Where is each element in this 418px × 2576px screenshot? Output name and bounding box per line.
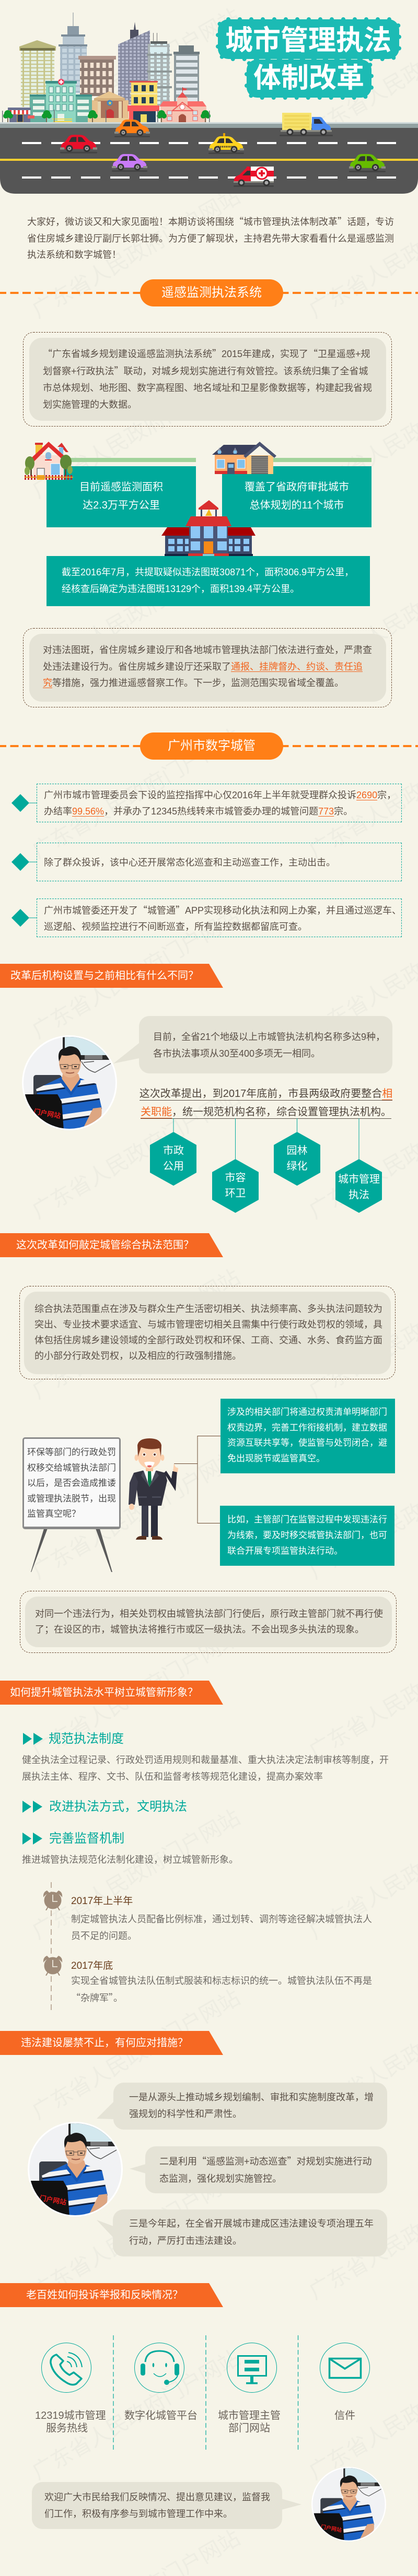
body: standardize system [22,1755,389,1782]
hexagon: landscaping: 绿化 [286,1160,307,1172]
banner question 1: 改革后机构设置与之前相比有什么不同？ [10,970,199,982]
panel: system description: 划实施管理的大数据。 [43,399,137,410]
watermark background: 广东省人民政府门户网站 [28,724,244,863]
speech bubble: first measure: 一是从源头上推动城乡规划编制、审批和实施制度改革，增 [129,2092,374,2102]
portrait photo 3 [311,2467,386,2542]
panel: system description: 划督察+行政执法”联动，对城乡规划实施进行有效管控。该系统归集了全省城 [43,364,368,377]
speech bubble: second measure: 态监测，强化规划实施管控。 [159,2173,282,2183]
watermark background: 广东省人民政府门户网站 [28,2165,244,2304]
panel: no duplicate enforcement: 对同一个违法行为，相关处罚权由城管执法部门行使后，原行政主管部门就不再行使 [35,1609,383,1619]
item: hotline statistics: 广州市城市管理委员会下设的监控指挥中心仅2016年上半年就受理群众投诉2690宗， [44,790,396,800]
item: mobile app [37,899,402,937]
panel: scope of enforcement: 体包括住房城乡建设领域的全部行政处罚权和环保、工商、交通、水务、食药监方面 [34,1335,382,1345]
truck [280,113,333,136]
body: supervision: 推进城管执法规范化法制化建设，树立城管新形象。 [22,1854,238,1865]
speech bubble: closing welcome: 欢迎广大市民给我们反映情况、提出意见建议，监督我 [44,2492,270,2502]
icon: double arrow 1 [23,1733,43,1745]
callout: example: 为线索，要及时移交城管执法部门，也可 [227,1530,387,1540]
timeline axis [51,1882,52,2010]
stat card: covered cities [222,466,371,527]
icon: double arrow 2 [22,1801,42,1813]
timeline label: first half of 2017: 2017年上半年 [71,1896,133,1907]
watermark background: 广东省人民政府门户网站 [28,1445,244,1584]
speech bubble: third measure: 行动，严厉打击违法建设。 [129,2236,242,2246]
watermark background: 广东省人民政府门户网站 [28,1265,244,1403]
reform statement: 关职能，统一规范机构名称，综合设置管理执法机构。 [141,1106,391,1118]
hexagon: municipal utilities: 公用 [163,1161,184,1172]
library building: ★ [108,101,112,105]
watermark background: 广东省人民政府门户网站 [28,1084,244,1223]
speech bubble: second measure [130,2146,387,2193]
title badge: 体制改革 [253,56,364,96]
panel: system description: 市总体规划、地形图、数字高程图、地名域址和卫星影像数据等，构建起我省规 [43,383,372,393]
timeline text 1: 员不足的问题。 [71,1931,137,1941]
brown tower [78,56,116,96]
item: patrol work: 除了群众投诉，该中心还开展常态化巡查和主动巡查工作，主动出击。 [44,857,335,868]
purple car [112,154,147,172]
intro paragraph: 执法系统和数字城管！ [27,250,121,260]
banner question 3: 如何提升城管执法水平树立城管新形象？ [10,1687,198,1698]
hospital [30,79,92,122]
stat card: illegal patches: 截至2016年7月，共提取疑似违法图斑30871个，面积306.9平方公里， [62,567,354,577]
reform statement [140,1088,392,1119]
item: mobile app: 广州市城管委还开发了“城管通”APP实现移动化执法和网上办案，并且通过巡逻车、 [44,903,401,917]
speech bubble: agencies today [114,1016,392,1073]
intro paragraph: 省住房城乡建设厅副厅长郭壮狮。为方便了解现状，主持君先带大家看看什么是遥感监测 [27,233,394,244]
section divider 2 [0,745,418,747]
flip chart question board: 或管理执法脱节，出现 [27,1493,116,1504]
diamond markers and connectors [11,794,37,927]
street trees [3,110,211,122]
road with lane markings [0,122,418,194]
speech bubble: third measure [97,2209,387,2256]
timeline text 2: “杂牌军”。 [71,1990,123,2004]
timeline label: end of 2017: 2017年底 [71,1960,113,1971]
section heading: remote sensing [140,279,283,306]
callout: example [220,1506,394,1566]
panel: scope of enforcement: 综合执法范围重点在涉及与群众生产生活密切相关、执法频率高、多头执法问题较为 [34,1304,382,1314]
stat card: monitored area: 目前遥感监测面积 [79,481,163,493]
panel: scope of enforcement: 的小部分行政处罚权，以及相应的行政强制措施。 [34,1351,241,1361]
section heading: remote sensing: 遥感监测执法系统 [161,286,262,300]
watermark background: 广东省人民政府门户网站 [28,364,244,503]
banner question 5: 老百姓如何投诉举报和反映情况？ [26,2289,183,2301]
timeline text 2: 实现全省城管执法队伍制式服装和标志标识的统一。城管执法队伍不再是 [71,1976,372,1986]
heading: supervision: 完善监督机制 [49,1831,124,1846]
callout: departments: 资源互联共享等，使监管与处罚闭合，避 [227,1438,387,1448]
banner question 4: 违法建设屡禁不止，有何应对措施？ [21,2037,188,2049]
watermark background: 广东省人民政府门户网站 [28,1625,244,1764]
icon: website monitor [227,2343,277,2393]
channel label: hotline: 服务热线 [46,2423,88,2434]
ambulance [234,167,274,187]
vehicles on the road [60,113,386,187]
slate tower [173,45,200,103]
channel label: letter: 信件 [334,2410,355,2421]
icon: red-roof house [25,442,73,480]
small striped shop [8,108,34,122]
callout: example: 联合开展专项监管执法行动。 [227,1546,343,1556]
panel: no duplicate enforcement: 了；在设区的市，城管执法将推行市或区一级执法。不会出现多头执法的现象。 [35,1624,364,1635]
banner question 2: 这次改革如何敲定城管综合执法范围？ [16,1239,194,1251]
stat card: covered cities: 覆盖了省政府审批城市 [245,481,349,493]
body: standardize system: 健全执法全过程记录、行政处罚适用规则和裁量基准、重大执法决定法制审核等制度，开 [22,1755,389,1765]
flip chart question board: 监管真空呢？ [27,1509,80,1519]
stat card: illegal patches: 经核查后确定为违法图斑13129个，面积139.4平方公里。 [62,584,299,594]
panel: scope of enforcement: 突出、专业技术要求适宜、与城市管理密切相关且需集中行使行政处罚权的领域，具 [34,1319,382,1330]
hexagon: landscaping: 园林 [286,1144,307,1156]
watermark background: 广东省人民政府门户网站 [28,2345,244,2484]
channel label: department website: 部门网站 [228,2423,270,2434]
stat card: covered cities: 总体规划的11个城市 [250,500,344,511]
panel: enforcement measures: 究等措施，强力推进遥感督察工作。下一步，监测范围实现省域全覆盖。 [43,678,344,688]
banner question 5 [0,2283,223,2307]
stat card: monitored area: 达2.3万平方公里 [83,500,160,511]
icon: presenter in suit [129,1438,178,1540]
city skyline illustration [2,13,211,122]
hexagon: sanitation [212,1159,259,1213]
item: mobile app: 巡逻船、视频监控进行不间断巡查，所有监控数据都留底可查。 [44,921,307,932]
icon: envelope letter [320,2343,370,2393]
item: hotline statistics: 办结率99.56%，并承办了12345热线转来市城管委办理的城管问题773宗。 [44,806,353,817]
hexagon: urban enforcement: 城市管理 [338,1173,380,1185]
panel: enforcement measures: 处违法建设行为。省住房城乡建设厅还采取了通报、挂牌督办、约谈、责任追 [43,661,363,671]
icon: double arrow 3 [22,1833,42,1845]
banner question 3 [0,1681,223,1705]
hexagon: municipal utilities: 市政 [163,1144,184,1156]
speech bubble: agencies today: 目前，全省21个地级以上市城管执法机构名称多达9种， [153,1032,385,1042]
channel label: department website: 城市管理主管 [218,2410,281,2421]
speech bubble: first measure [97,2083,387,2130]
flip chart question board: 以后，是否会造成推诿 [27,1478,116,1488]
portrait photo 1 [22,1035,117,1130]
channel label: digital platform: 数字化城管平台 [124,2410,198,2421]
hexagon: landscaping [274,1132,320,1186]
callout: example: 比如，主管部门在监管过程中发现违法行 [227,1515,387,1525]
function hexagons [150,1118,382,1213]
icon: school building [161,500,256,556]
icon: customer-service headset [134,2343,184,2393]
hexagon: urban enforcement: 执法 [349,1189,369,1201]
panel: system description: “广东省城乡规划建设遥感监测执法系统”2015年建成，实现了“卫星遥感+规 [43,347,370,360]
watermark background: 广东省人民政府门户网站 [28,184,244,323]
channel label: hotline: 12319城市管理 [35,2410,106,2421]
callout: departments: 涉及的相关部门将通过权责清单明晰部门 [227,1407,387,1417]
item: patrol work [37,843,402,881]
hexagon: sanitation: 市容 [225,1172,246,1184]
banner question 4 [0,2031,223,2055]
channel column dividers [113,2335,299,2450]
banner question 2 [0,1233,223,1257]
heading: standardize system: 规范执法制度 [49,1732,124,1746]
panel: system description [23,332,392,427]
timeline text 1: 制定城管执法人员配备比例标准，通过划转、调剂等途径解决城管执法人 [71,1914,372,1924]
speech bubble: second measure: 二是利用“遥感监测+动态巡查”对规划实施进行动 [159,2154,372,2168]
clock-tower building [159,87,206,122]
panel: no duplicate enforcement [20,1591,397,1653]
watermark background: 广东省人民政府门户网站 [28,1805,244,1944]
library building [88,91,131,122]
yellow shop building [127,81,159,122]
flip chart question board: 环保等部门的行政处罚 [27,1447,116,1457]
section heading: Guangzhou digital city management: 广州市数字城管 [168,739,256,753]
title badge: 城市管理执法 [225,18,391,58]
title badge [216,17,401,100]
connector bracket [174,1436,220,1523]
icon: telephone hotline [41,2343,91,2393]
callout: departments: 权责边界，完善工作衔接机制，建立数据 [227,1422,387,1433]
speech bubble: closing welcome [32,2482,301,2529]
portrait photo 2 [28,2122,123,2217]
intro paragraph: 大家好，微访谈又和大家见面啦！本期访谈将围绕“城市管理执法体制改革”话题，专访 [27,215,394,228]
stat card: illegal patches [47,556,370,606]
reform statement: 这次改革提出，到2017年底前，市县两级政府要整合相 [140,1088,392,1100]
panel: enforcement measures [23,628,392,707]
watermark background: 广东省人民政府门户网站 [28,544,244,683]
timeline text 2 [71,1976,372,2004]
speech bubble: agencies today: 各市执法事项从30至400多项无一相同。 [153,1048,320,1059]
green strip left [63,458,196,462]
intro paragraph [27,215,394,260]
hexagon: municipal utilities [150,1132,196,1186]
blue-grey tower [59,13,87,93]
channel label: hotline [35,2409,99,2435]
purple tower [118,22,150,104]
banner question 1 [0,964,223,988]
section heading: Guangzhou digital city management [140,732,283,760]
icon: orange house with garage [212,442,276,474]
item: hotline statistics [37,784,402,822]
speech bubble: closing welcome: 们工作，积极有序参与到城市管理工作中来。 [44,2509,233,2519]
channel label: department website [218,2409,281,2435]
grey tower [147,33,172,107]
icon: alarm clock 2 [43,1956,63,1976]
panel: scope of enforcement [19,1286,396,1379]
flip chart question board [22,1437,121,1572]
watermark background: 广东省人民政府门户网站 [28,4,244,143]
icon: alarm clock 1 [43,1890,63,1910]
watermark background: 广东省人民政府门户网站 [28,1985,244,2124]
speech bubble: first measure: 强规划的科学性和严肃性。 [129,2109,242,2119]
panel: enforcement measures: 对违法图斑，省住房城乡建设厅和各地城市管理执法部门依法进行查处，严肃查 [43,645,372,655]
taxi [208,133,244,154]
section divider 1 [0,292,418,294]
watermark background: 广东省人民政府门户网站 [28,904,244,1043]
hexagon: sanitation: 环卫 [225,1188,246,1199]
stat card: monitored area [47,466,196,527]
green strip right [273,458,371,462]
timeline text 1 [71,1914,372,1941]
olive tower [19,40,56,107]
body: standardize system: 展执法主体、程序、文书、队伍和监督考核等规范化建设，提高办案效率 [22,1771,323,1782]
street lamps [2,110,210,122]
red car [60,135,97,153]
heading: improve methods: 改进执法方式，文明执法 [49,1800,187,1814]
callout: departments: 免出现脱节或监管真空。 [227,1454,325,1463]
orange car [114,120,150,137]
callout: departments [220,1399,395,1473]
speech bubble: third measure: 三是今年起，在全省开展城市建成区违法建设专项治理五年 [129,2218,374,2229]
hexagon: urban enforcement [335,1159,382,1213]
green car [349,154,386,172]
flip chart question board: 权移交给城管执法部门 [27,1463,116,1472]
